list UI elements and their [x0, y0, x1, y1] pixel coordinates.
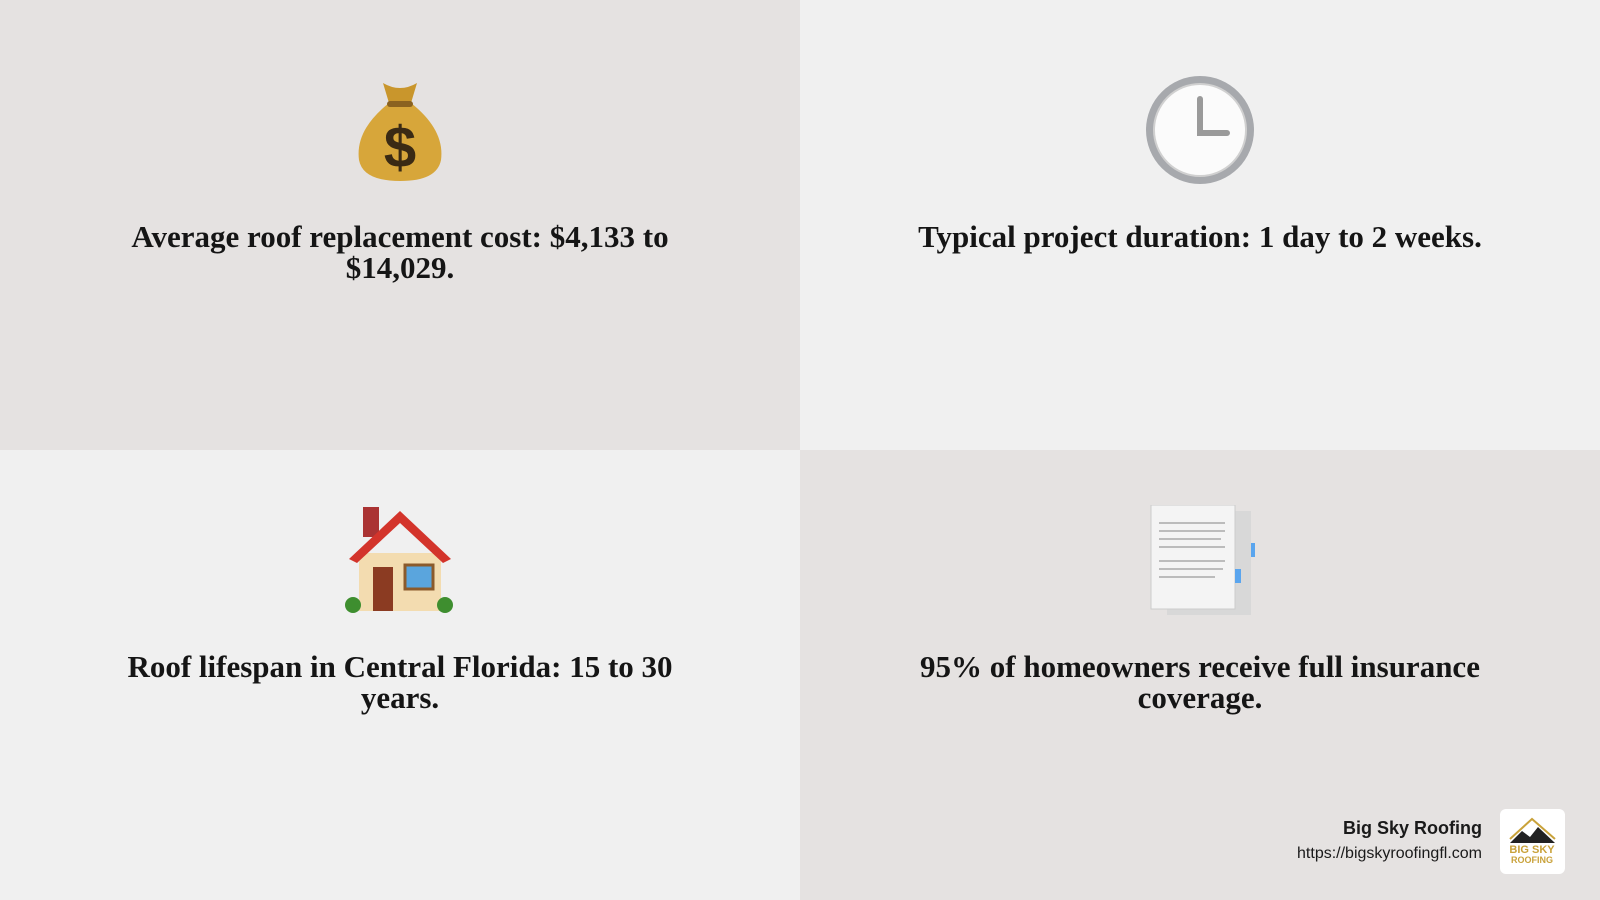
text: duration: Typical project duration: 1 day to 2 weeks.: [918, 219, 1482, 254]
panel: cost: [0, 0, 800, 450]
panel: duration: [800, 0, 1600, 450]
icon: clock: [1146, 76, 1254, 184]
icon: money bag: $: [384, 115, 416, 180]
logo: BIG SKY: [1509, 844, 1555, 856]
icon: document: [1150, 505, 1255, 615]
brand block: [1297, 809, 1565, 874]
brand name: Big Sky Roofing: [1343, 818, 1482, 838]
panel: lifespan: [0, 450, 800, 900]
panel: insurance: [800, 450, 1600, 900]
icon: house: [345, 507, 453, 613]
text: cost: Average roof replacement cost: $4,133 to $14,029.: [131, 219, 669, 285]
icon: money bag: [358, 83, 442, 181]
logo: [1500, 809, 1565, 874]
logo: ROOFING: [1511, 855, 1553, 865]
brand url: https://bigskyroofingfl.com: [1297, 845, 1482, 862]
text: lifespan: Roof lifespan in Central Florida: 15 to 30 years.: [127, 649, 673, 715]
text: insurance: 95% of homeowners receive full insurance coverage.: [920, 649, 1480, 715]
